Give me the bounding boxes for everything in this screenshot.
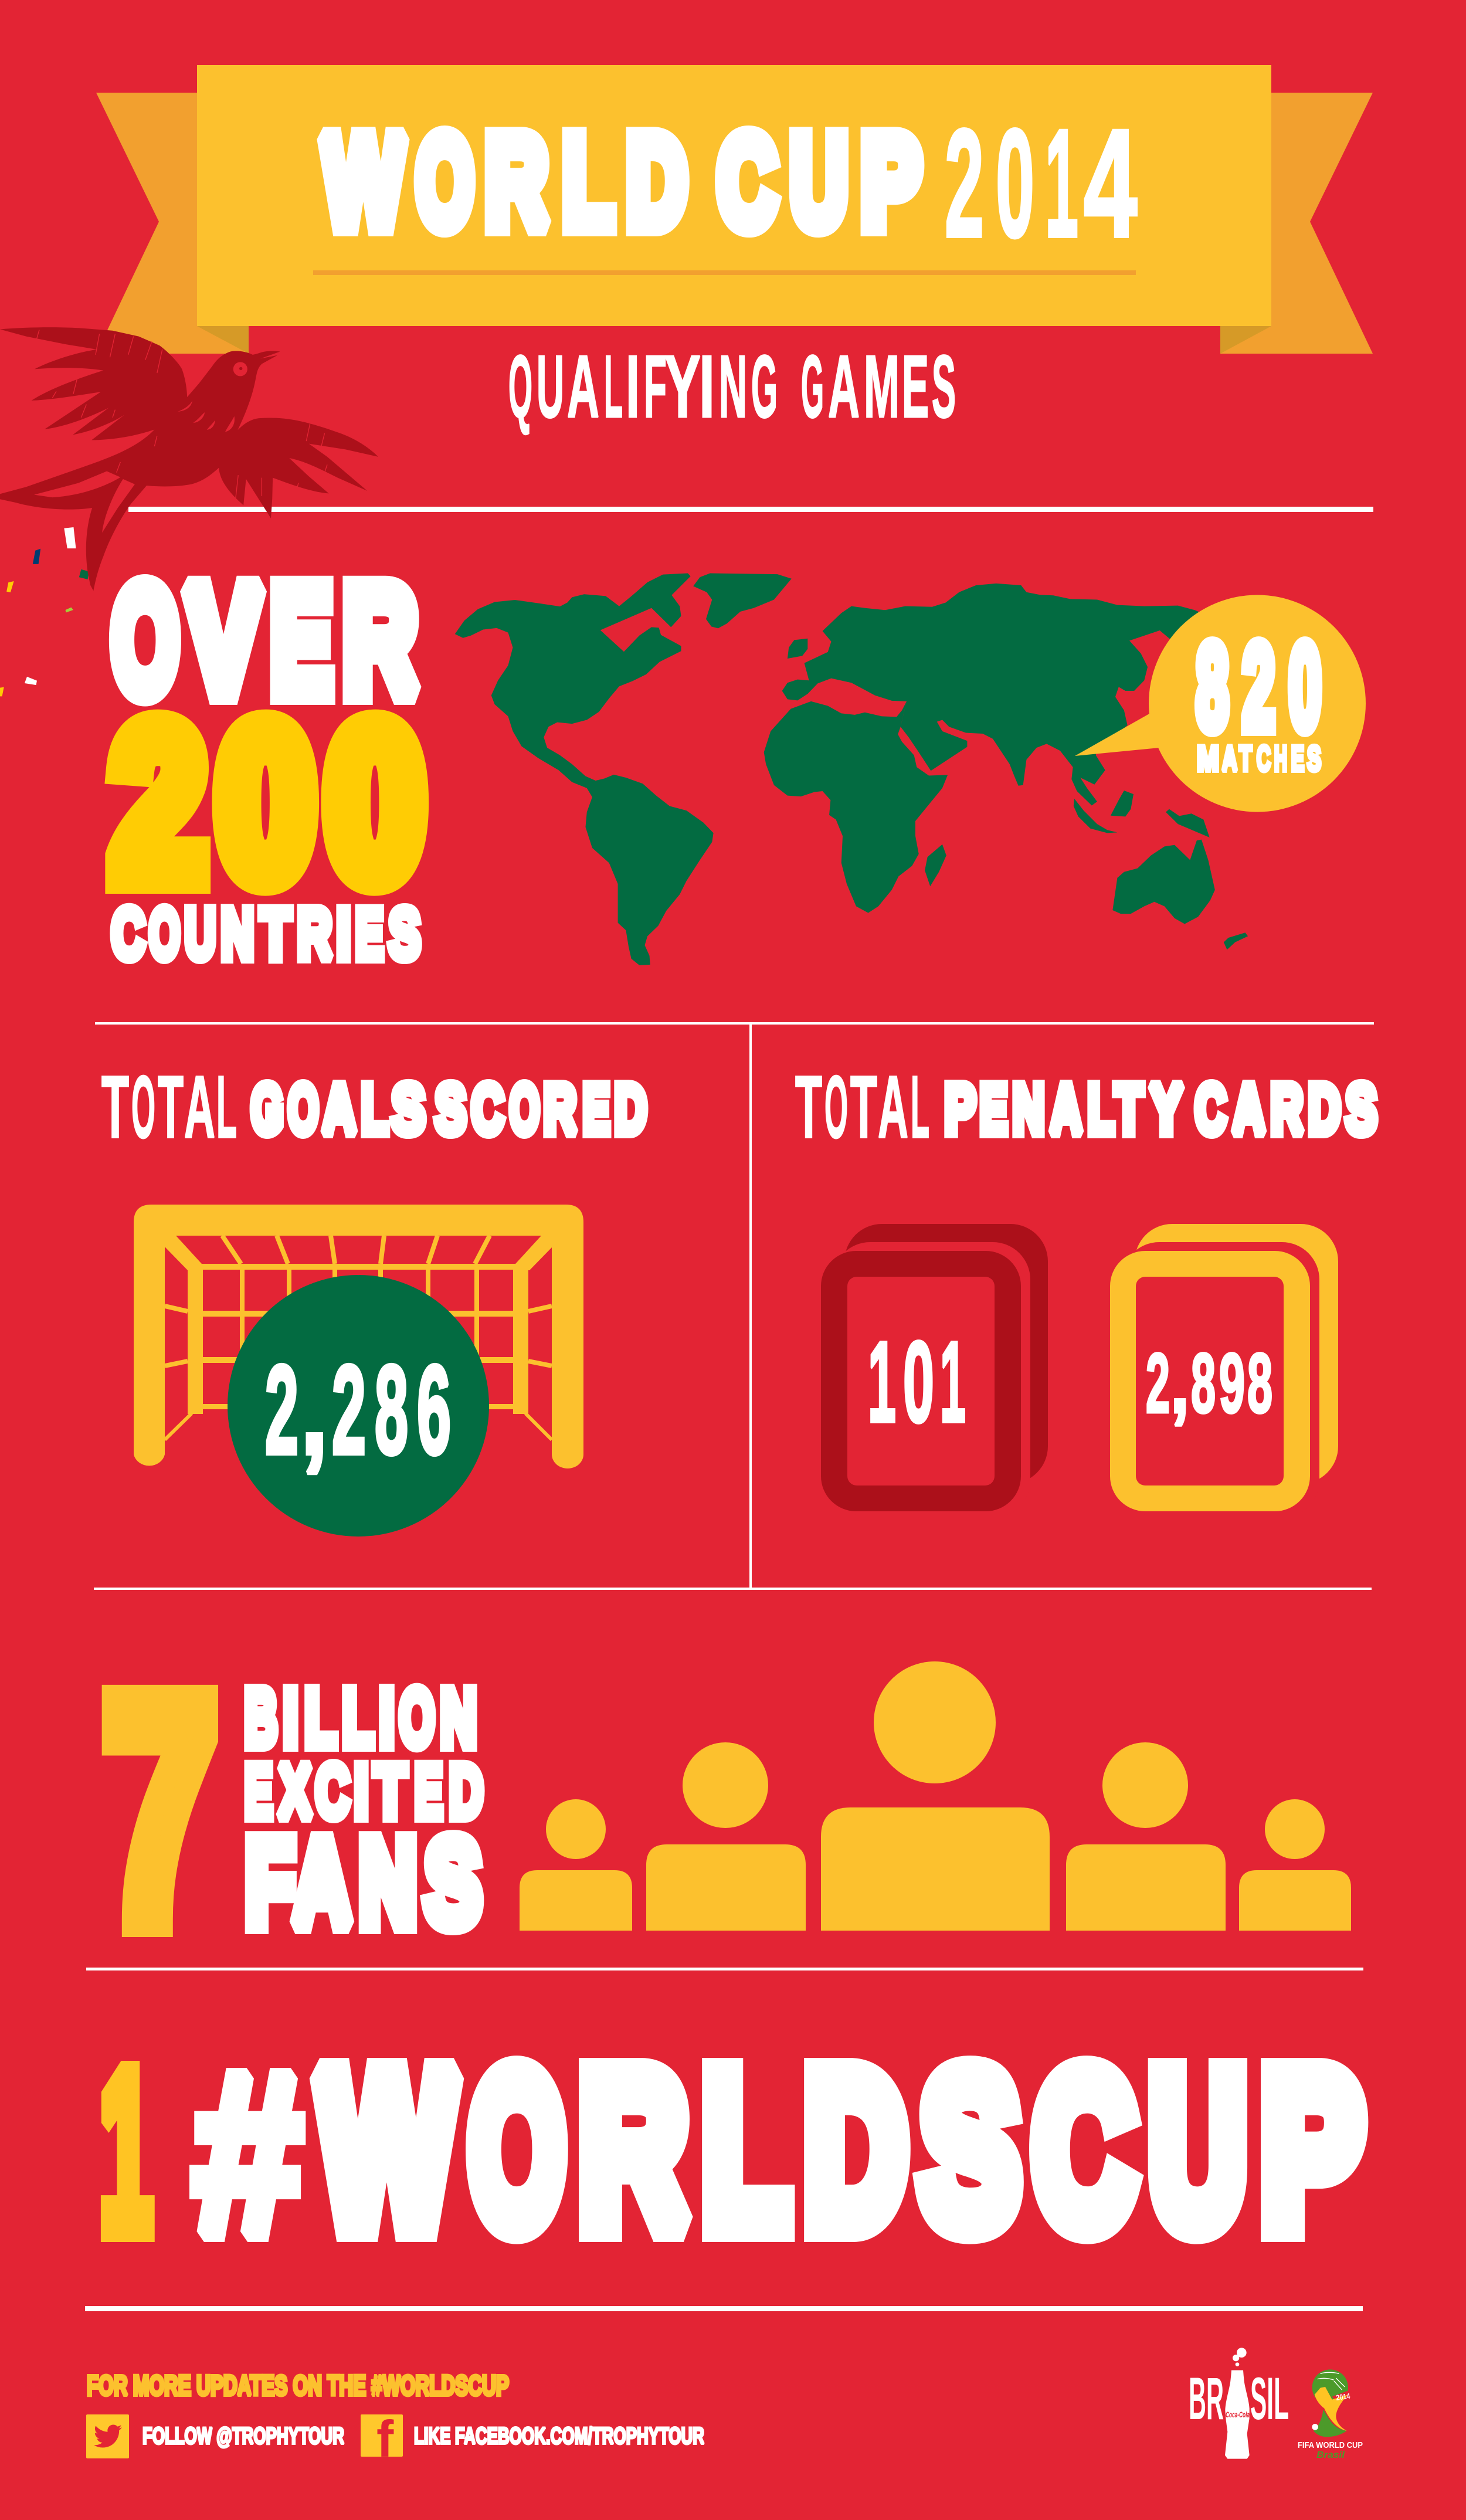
logo: fifa world cup trophy: FIFA WORLD CUP [1298, 2440, 1363, 2450]
footer: social links [86, 2370, 704, 2468]
number 2,286: 8 [375, 1339, 408, 1480]
title banner [96, 65, 1373, 354]
label matches: M [1197, 739, 1219, 778]
stat: 7 billion excited fans [104, 1634, 483, 1987]
subtitle: qualifying games: M [864, 337, 900, 436]
logo: fifa world cup trophy: 2014 [1335, 2392, 1351, 2402]
subtitle: qualifying games: E [902, 337, 929, 436]
stat: 7 billion excited fans: E [415, 1750, 443, 1833]
footer: social links: LIKE FACEBOOK.COM/TROPHYTOUR [414, 2423, 704, 2449]
title: 2014: 0 [996, 97, 1034, 269]
stat: 7 billion excited fans: S [425, 1814, 481, 1951]
title: cup: U [790, 109, 847, 255]
headline: over 200 countries [111, 554, 423, 974]
subtitle: qualifying games: I [626, 337, 640, 436]
hashtag word: R [580, 2027, 687, 2273]
title: world: L [563, 109, 613, 255]
heading: total goals scored: O [288, 1070, 318, 1148]
stat: 7 billion excited fans: I [379, 1673, 394, 1763]
stat: 7 billion excited fans: D [449, 1750, 483, 1833]
stat: 7 billion excited fans: B [245, 1673, 277, 1763]
heading: total goals scored: D [615, 1070, 647, 1148]
number 2,286: 2 [332, 1339, 366, 1480]
number 820: 8 [1196, 619, 1229, 754]
title: 2014: 1 [1045, 97, 1078, 269]
heading: total penalty cards: T [795, 1057, 822, 1156]
number 7: 7 [104, 1634, 216, 1987]
stat: 7 billion excited fans: N [440, 1673, 477, 1763]
headline: over 200 countries: R [344, 554, 417, 726]
icon: fans crowd [520, 1661, 1351, 1931]
subtitle: qualifying games: L [604, 337, 623, 436]
stat: 7 billion excited fans: C [315, 1750, 349, 1833]
heading: total goals scored: A [323, 1070, 356, 1148]
label countries: C [111, 894, 145, 974]
callout: 820 matches: 0 [1289, 619, 1321, 754]
heading: total goals scored: T [101, 1057, 129, 1156]
red card stack: 1 [940, 1318, 966, 1446]
hashtag word: P [1262, 2027, 1362, 2273]
number 2,898: 2 [1146, 1336, 1170, 1430]
number 200: 2 [112, 681, 205, 924]
logo: brasil bottle [1189, 2348, 1289, 2459]
subtitle: qualifying games: I [699, 337, 715, 436]
hashtag symbol: # [194, 2026, 301, 2282]
subtitle: qualifying games: G [751, 337, 778, 436]
stat: 7 billion excited fans: X [279, 1750, 311, 1833]
stat: 7 billion excited fans: E [245, 1750, 273, 1833]
label countries: R [297, 894, 332, 974]
heading: total penalty cards: N [1013, 1070, 1044, 1148]
heading: total goals scored: S [392, 1070, 425, 1148]
stat: 7 billion excited fans: I [354, 1750, 368, 1833]
headline: over 200 countries: E [271, 554, 332, 726]
label matches: A [1222, 739, 1237, 778]
heading: total penalty cards: A [878, 1057, 908, 1156]
label matches: E [1291, 739, 1304, 778]
heading: total penalty cards: T [1115, 1070, 1143, 1148]
heading: total penalty cards: S [1346, 1070, 1377, 1148]
stat: 7 billion excited fans: I [283, 1673, 298, 1763]
label matches: S [1307, 739, 1321, 778]
heading: total goals scored [101, 1057, 647, 1156]
heading: total goals scored: S [435, 1070, 466, 1148]
heading: total goals scored: L [216, 1057, 237, 1156]
heading: total goals scored: L [361, 1070, 388, 1148]
title: 2014: 2 [945, 97, 984, 269]
stat: 7 billion excited fans: L [342, 1673, 374, 1763]
heading: total goals scored: O [510, 1070, 539, 1148]
number 2,898: 9 [1219, 1336, 1245, 1430]
footer: social links: FOLLOW @TROPHYTOUR [142, 2423, 344, 2449]
stat: 7 billion excited fans: N [359, 1814, 416, 1951]
subtitle: qualifying games: G [801, 337, 824, 436]
number 2,898: 8 [1191, 1336, 1216, 1430]
heading: total penalty cards: E [980, 1070, 1007, 1148]
infographic canvas: SIL [1250, 2365, 1289, 2432]
title: cup: P [861, 109, 921, 255]
label countries: S [389, 894, 420, 974]
footer: social links: FOR MORE UPDATES ON THE #WORLDSCUP [87, 2370, 509, 2402]
hashtag word: U [1150, 2027, 1246, 2273]
stat: 7 billion excited fans: O [399, 1673, 435, 1763]
number 2,286: 2 [265, 1339, 298, 1480]
stat: 7 billion excited fans: T [374, 1750, 406, 1833]
hashtag: 1 #worldscup: 1 [100, 2023, 152, 2279]
subtitle: qualifying games: Q [508, 337, 532, 436]
heading: total penalty cards: A [1050, 1070, 1082, 1148]
logo: brasil bottle: Coca-Cola [1226, 2410, 1250, 2419]
logo: fifa world cup trophy [1298, 2369, 1363, 2460]
heading: total goals scored: C [471, 1070, 504, 1148]
heading: total penalty cards: P [945, 1070, 976, 1148]
heading: total penalty cards: D [1308, 1070, 1341, 1148]
goals badge [228, 1275, 489, 1537]
title: world: W [323, 109, 403, 255]
icon: twitter [86, 2414, 129, 2458]
hashtag word: O [470, 2027, 564, 2273]
number 200: 0 [327, 681, 423, 924]
number 101: 1 [868, 1318, 896, 1446]
heading: total penalty cards: C [1195, 1070, 1226, 1148]
world map [455, 574, 1248, 965]
heading: total penalty cards: R [1271, 1070, 1303, 1148]
subtitle: qualifying games: A [567, 337, 599, 436]
hashtag: 1 #worldscup [100, 2023, 1362, 2282]
stat: 7 billion excited fans: A [293, 1814, 351, 1951]
label countries: U [185, 894, 216, 974]
hashtag word: C [1034, 2027, 1134, 2273]
heading: total goals scored: T [158, 1057, 184, 1156]
title: world: D [627, 109, 687, 255]
red card stack [821, 1224, 1048, 1518]
subtitle: qualifying games: Y [664, 337, 701, 436]
heading: total penalty cards: L [1088, 1070, 1114, 1148]
subtitle: qualifying games: U [537, 337, 564, 436]
label matches: C [1257, 739, 1271, 778]
yellow card stack [1110, 1224, 1338, 1518]
confetti [0, 527, 89, 696]
icon: goal net [134, 1205, 583, 1468]
stat: 7 billion excited fans: F [246, 1814, 294, 1951]
number 200: 0 [218, 681, 313, 924]
hashtag word: L [703, 2027, 789, 2273]
title: world: O [416, 109, 473, 255]
heading: total penalty cards: A [1233, 1070, 1265, 1148]
number 101: 0 [903, 1318, 934, 1446]
hashtag word: W [320, 2027, 455, 2273]
stat: 7 billion excited fans: L [305, 1673, 337, 1763]
heading: total penalty cards: T [850, 1057, 877, 1156]
hashtag word: S [921, 2027, 1019, 2273]
label matches: H [1274, 739, 1287, 778]
heading: total goals scored: E [583, 1070, 610, 1148]
subtitle: qualifying games: N [719, 337, 747, 436]
logo: brasil bottle: BR [1189, 2365, 1224, 2432]
label countries: I [337, 894, 351, 974]
heading: total penalty cards [795, 1057, 1377, 1156]
subtitle: qualifying games [508, 337, 956, 436]
label countries: E [355, 894, 384, 974]
hashtag word: D [805, 2027, 906, 2273]
heading: total penalty cards: Y [1150, 1070, 1183, 1148]
icon: facebook: f [376, 2410, 394, 2468]
infographic canvas: S [932, 337, 956, 436]
heading: total goals scored: G [251, 1070, 283, 1148]
number 820: 2 [1243, 619, 1275, 754]
subtitle: qualifying games: A [828, 337, 860, 436]
heading: total penalty cards: O [824, 1057, 848, 1156]
icon: facebook [361, 2410, 403, 2468]
heading: total penalty cards: L [911, 1057, 929, 1156]
heading: total goals scored: R [544, 1070, 576, 1148]
label countries: T [260, 894, 291, 974]
subtitle: qualifying games: F [644, 337, 667, 436]
logo: fifa world cup trophy: Brasil [1316, 2450, 1345, 2460]
label countries: N [221, 894, 254, 974]
bird illustration [0, 327, 378, 591]
callout: 820 matches [1075, 595, 1366, 812]
number 2,286: , [301, 1339, 328, 1480]
title: cup: C [718, 109, 776, 255]
title: 2014: 4 [1084, 97, 1138, 269]
headline: over 200 countries: O [112, 554, 178, 726]
goals badge: 6 [417, 1339, 451, 1480]
headline: over 200 countries: V [187, 554, 260, 726]
number 2,898: 8 [1247, 1336, 1272, 1430]
heading: total goals scored: O [131, 1057, 155, 1156]
label countries: O [149, 894, 180, 974]
heading: total goals scored: A [184, 1057, 215, 1156]
title: world: R [486, 109, 548, 255]
number 2,898: , [1170, 1336, 1189, 1430]
label matches: T [1239, 739, 1252, 778]
